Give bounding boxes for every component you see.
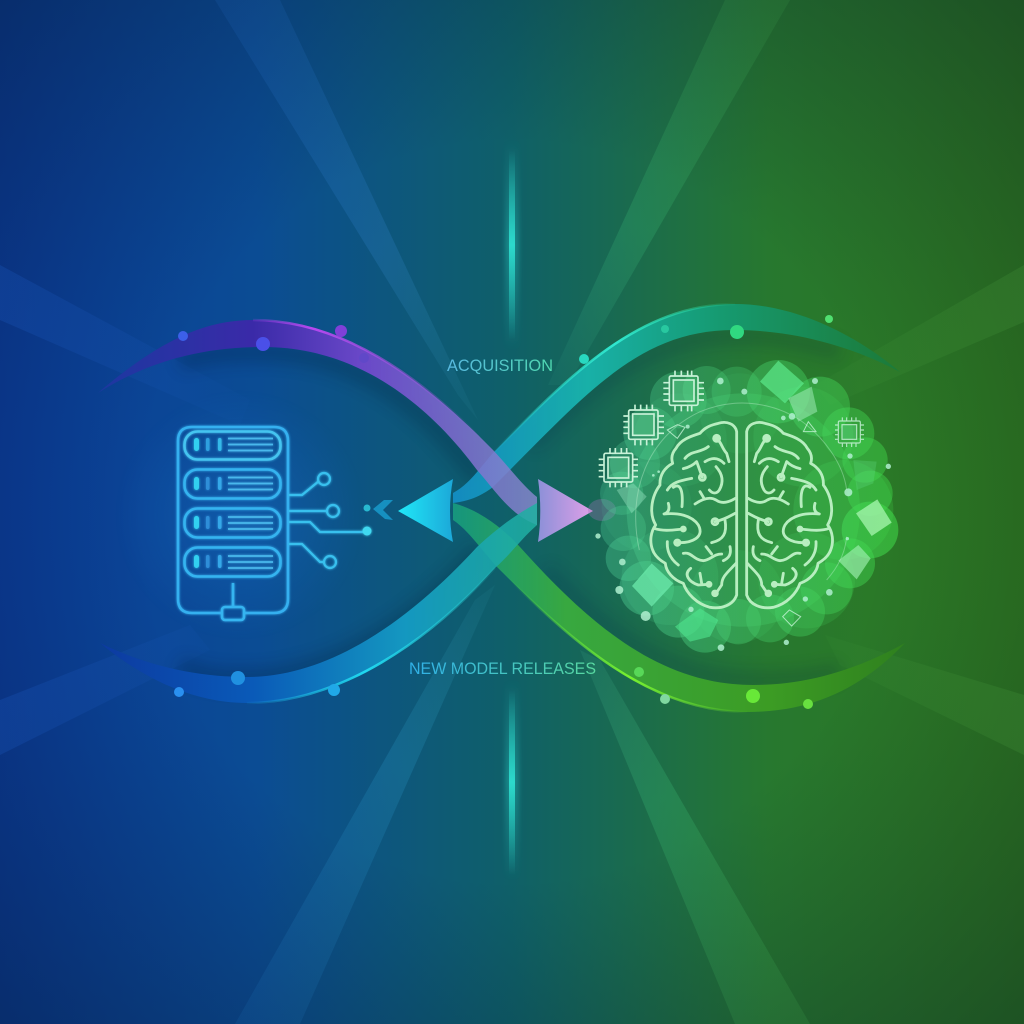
floating dots [595,378,891,651]
ring [636,403,847,580]
right hemisphere [747,422,832,608]
circuit connectors [289,473,372,568]
ribbon dots: green [634,667,813,709]
brain cluster [595,360,898,653]
label: new model releases: NEW MODEL RELEASES [409,659,596,678]
brain outline and folds [651,422,832,608]
label: acquisition: ACQUISITION [447,356,553,375]
glow behind server [115,390,365,640]
translucent blobs [600,360,898,653]
small faint blob near brain [588,499,616,521]
small outline shapes [667,422,816,626]
small dot and chevron [364,500,393,520]
ribbon shadows [180,335,840,680]
ribbon: purple upper left [98,320,537,525]
ribbon dots: blue [174,671,340,697]
right arrow [538,479,593,542]
vertical glow line top [505,140,519,350]
vertical glow line bottom [505,680,519,880]
left hemisphere [651,422,737,608]
icon: server rack [178,427,288,620]
ribbon dots: purple [178,325,369,363]
left arrow [398,479,453,542]
diamonds [617,361,892,642]
ribbon: blue lower left [100,503,537,703]
ribbon dots: cyan [579,315,833,364]
ribbon: green lower right [453,503,905,712]
ribbon: cyan upper right [453,304,900,503]
chips [599,371,864,487]
